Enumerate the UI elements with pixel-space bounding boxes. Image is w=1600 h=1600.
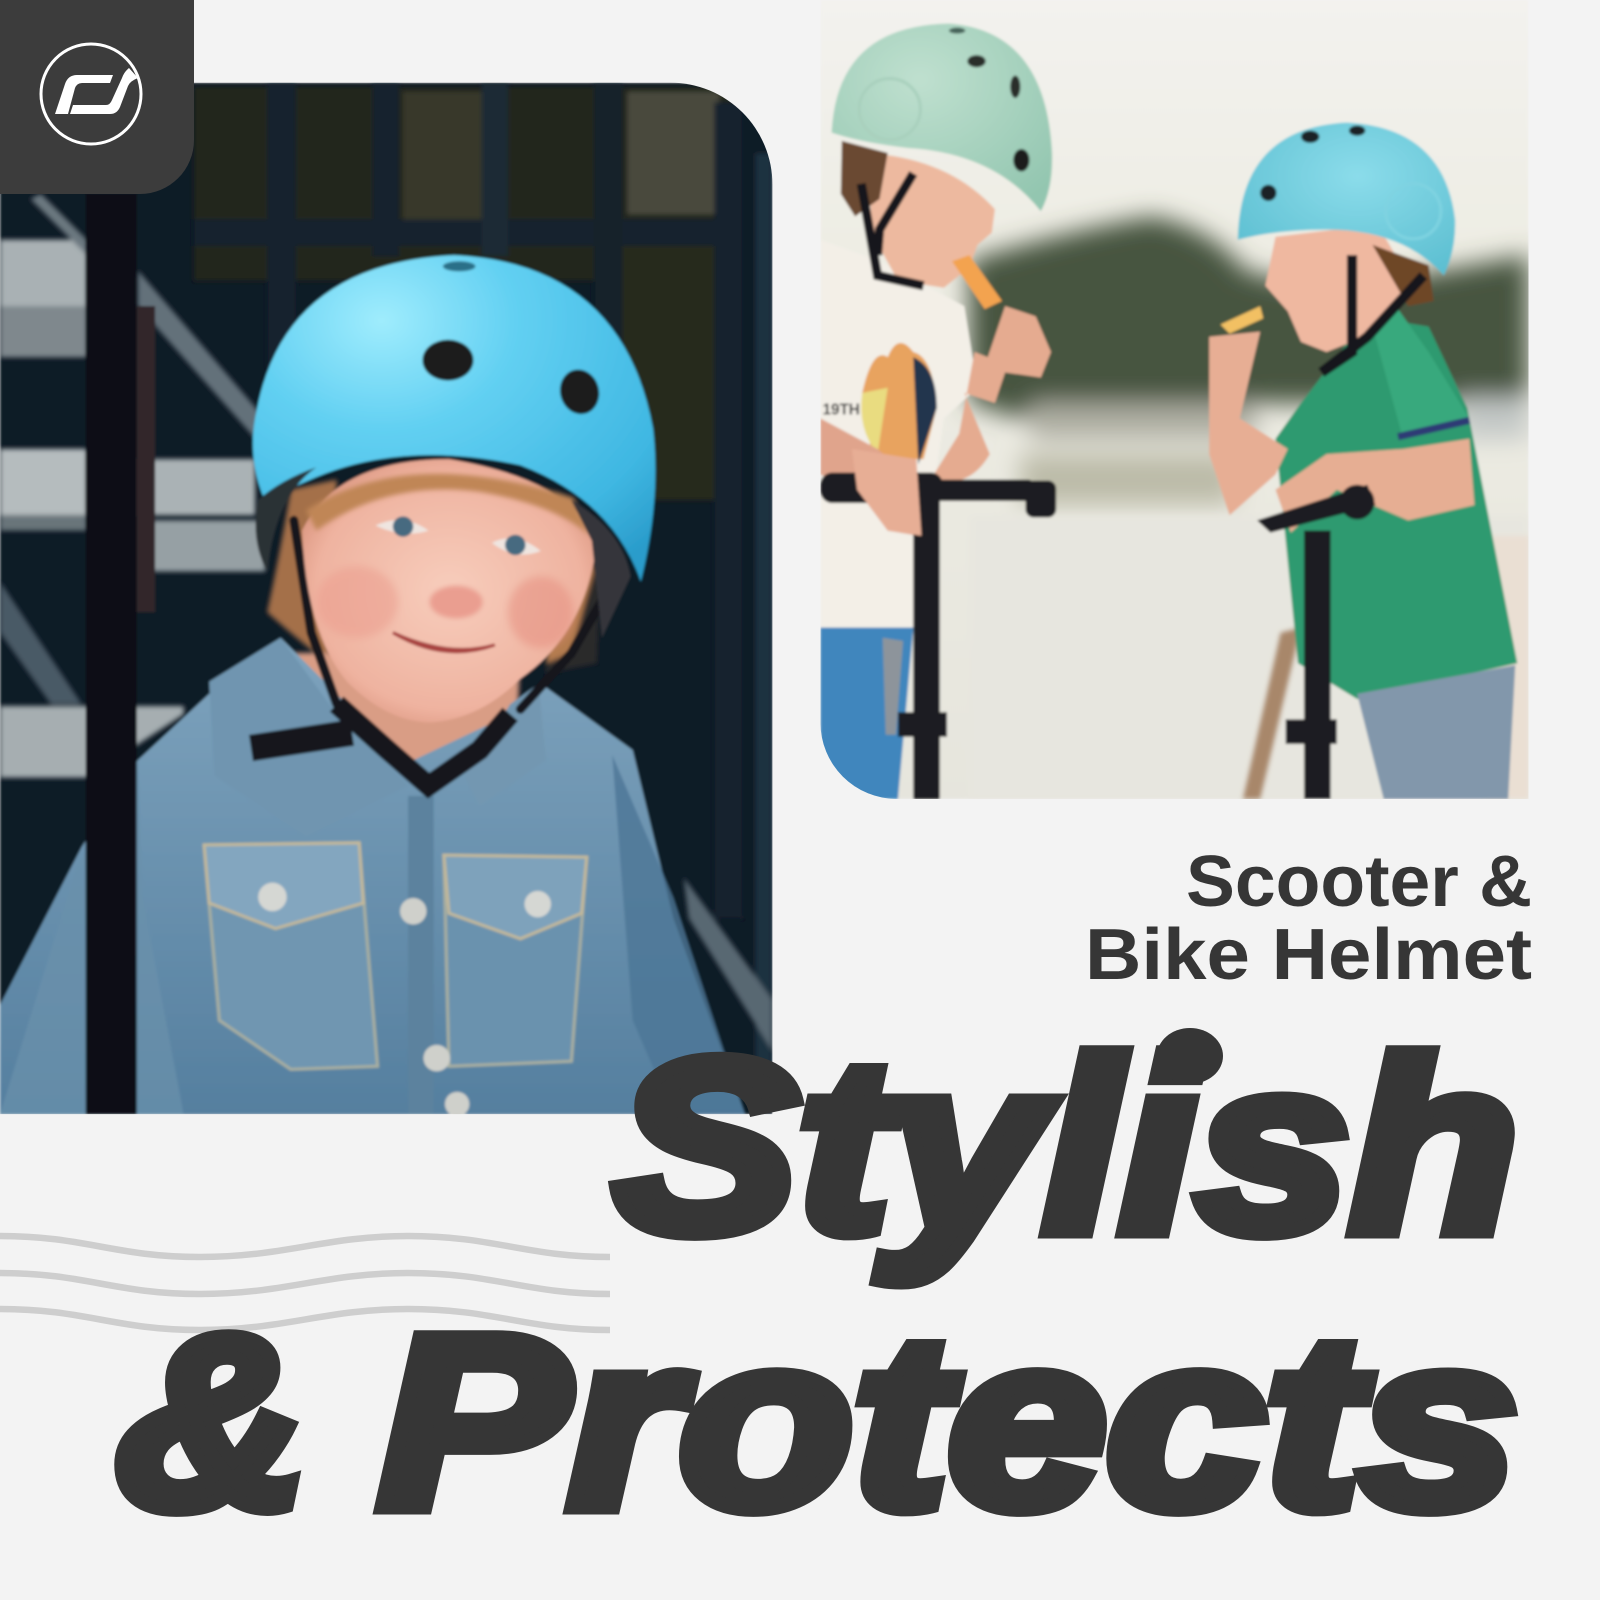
right boy blue helmet (1238, 122, 1455, 276)
subheading: Scooter & (1186, 842, 1532, 922)
subheading (1085, 842, 1532, 995)
headline (116, 1009, 1518, 1560)
headline: & (116, 1285, 308, 1560)
chin strap (251, 704, 510, 786)
logo mark (41, 44, 141, 144)
stair post (86, 194, 137, 1114)
helmet (253, 255, 655, 582)
buttons (258, 883, 287, 911)
photo: girl wearing a blue helmet (0, 83, 772, 1116)
neck and hair (267, 480, 602, 796)
right boy head (1265, 224, 1413, 352)
decorative wavy lines (0, 1236, 610, 1330)
right boy (1209, 122, 1517, 799)
jacket (0, 638, 745, 1116)
chest pockets (206, 880, 381, 1072)
left boy (820, 23, 1052, 799)
left boy head (867, 153, 995, 288)
left boy mint helmet (832, 23, 1052, 211)
scooter left (820, 472, 1056, 799)
left boy: 19TH (822, 401, 860, 418)
photo: two boys with scooters (820, 0, 1529, 799)
headline: Protects (378, 1285, 1518, 1560)
scooter right (1257, 485, 1376, 799)
subheading: Bike Helmet (1085, 915, 1532, 995)
helmet straps (294, 520, 604, 709)
logo badge (0, 0, 194, 194)
left boy hand (852, 449, 921, 536)
face (302, 459, 597, 722)
headline: Stylish (614, 1009, 1518, 1284)
